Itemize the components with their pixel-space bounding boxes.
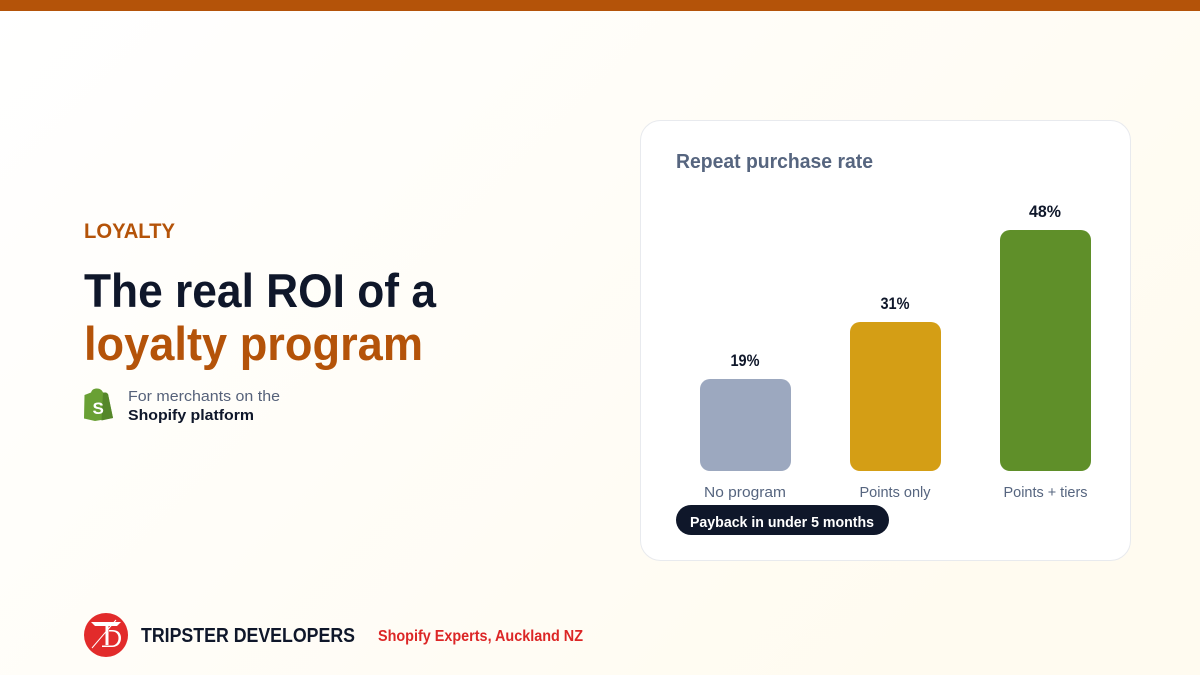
bar: Points + tiers 48%: Points + tiers — [1004, 485, 1088, 501]
icon: Tripster Developers logo — [84, 613, 128, 657]
icon: Shopify bag: S — [92, 399, 104, 418]
callout: payback pill — [676, 505, 889, 535]
bar: Points only 31%: 31% — [880, 295, 910, 313]
bar: No program 19%: 19% — [730, 352, 760, 370]
brand tagline: Shopify Experts, Auckland NZ — [378, 628, 583, 645]
brand name: TRIPSTER DEVELOPERS — [141, 625, 355, 647]
callout: payback pill: Payback in under 5 months — [690, 514, 874, 531]
eyebrow: LOYALTY: LOYALTY — [84, 220, 175, 243]
bar: Points only 31% — [850, 295, 941, 501]
panel: repeat purchase rate chart — [640, 120, 1130, 560]
chart heading: Repeat purchase rate — [676, 151, 873, 173]
subtitle: audience: Shopify platform — [128, 407, 254, 424]
bar: Points + tiers 48% — [1000, 202, 1091, 501]
icon: Shopify bag — [84, 388, 113, 421]
subtitle: audience — [128, 388, 280, 424]
bar: No program 19% — [700, 352, 791, 501]
bar: Points + tiers 48%: 48% — [1029, 202, 1061, 221]
title: The real ROI of a — [84, 264, 437, 317]
top accent bar — [0, 0, 1200, 11]
title: loyalty program — [84, 317, 423, 370]
bar: No program 19%: No program — [704, 485, 786, 501]
bar: Points only 31%: Points only — [860, 485, 931, 501]
subtitle: audience: For merchants on the — [128, 388, 280, 405]
title — [84, 264, 437, 370]
